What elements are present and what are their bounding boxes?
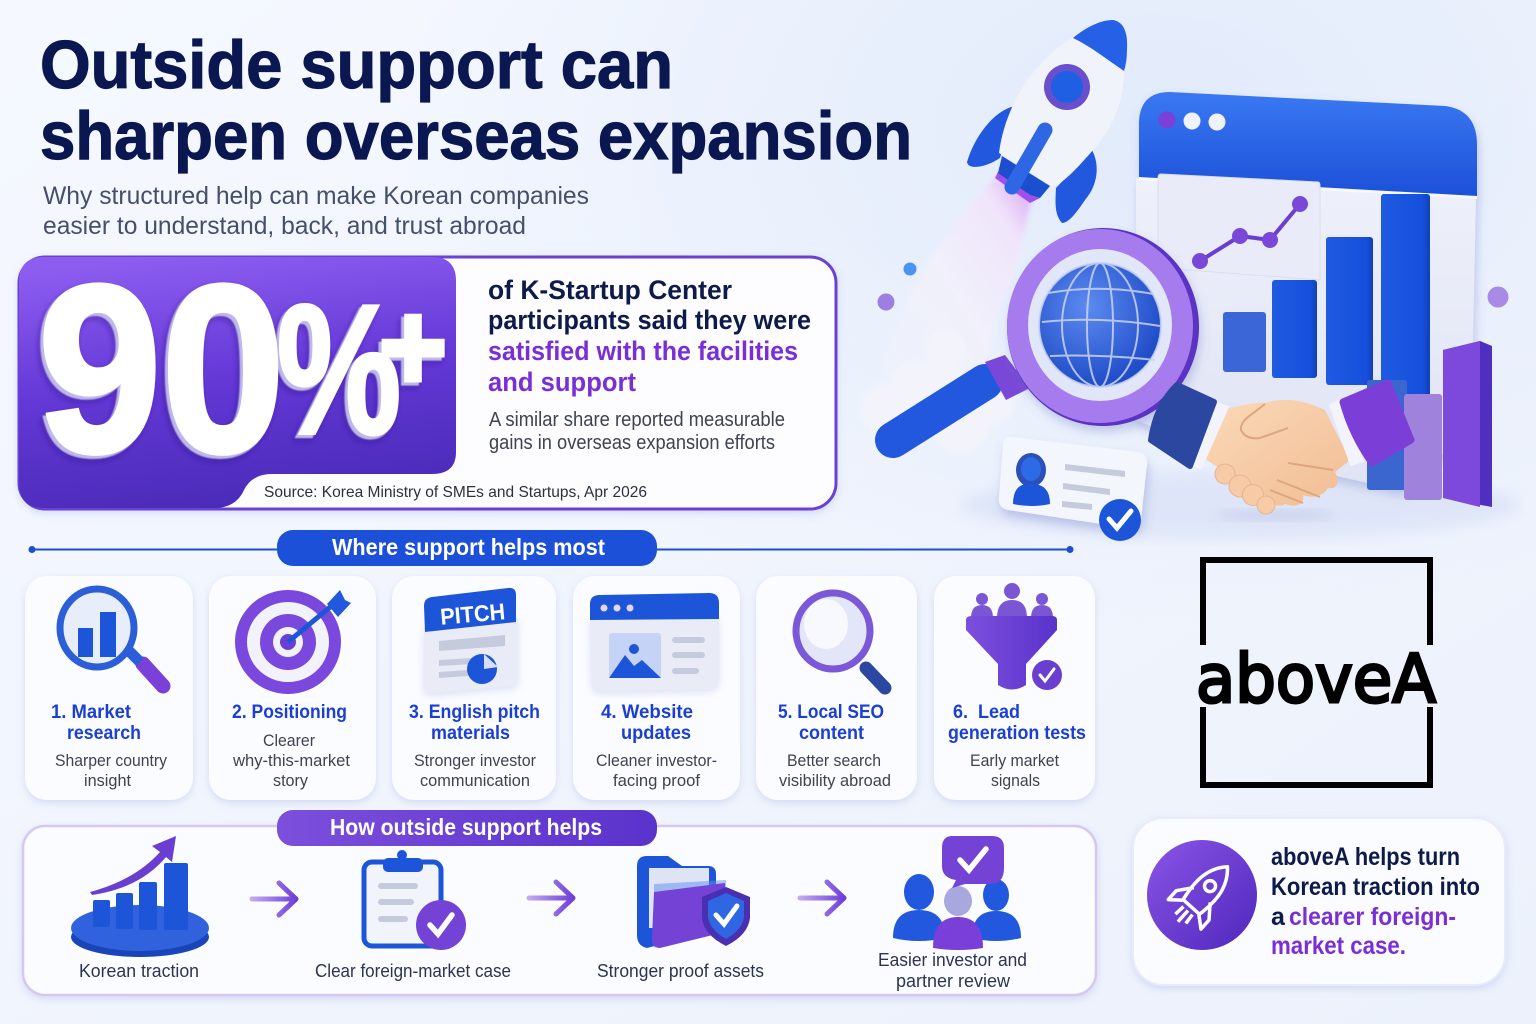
card text: signals: [991, 771, 1040, 790]
card text: updates: [621, 722, 691, 744]
magnifying glass with globe: [893, 228, 1199, 440]
card text: 6. Lead: [953, 701, 1020, 723]
big number 90%+: 90: [38, 237, 285, 502]
line chart: [1192, 196, 1308, 269]
card text: Early market: [970, 751, 1059, 770]
title: sharpen overseas expansion: [40, 98, 912, 174]
card text: [232, 701, 350, 790]
arrow: [529, 882, 573, 914]
icon: rocket badge: [1147, 840, 1257, 950]
icon: website window: [590, 593, 719, 691]
card text: [51, 701, 167, 790]
stat statement: satisfied with the facilities: [488, 336, 798, 366]
arrow: [252, 883, 296, 915]
big number 90%+: +: [379, 278, 447, 417]
card text: generation tests: [948, 722, 1086, 744]
callout text: [1271, 843, 1480, 960]
title: [40, 27, 912, 174]
card text: why-this-market: [232, 751, 350, 770]
label: Korean traction: [79, 961, 199, 981]
icon: pitch document: [423, 588, 518, 693]
rocket: [967, 20, 1127, 223]
panel: 90% statistic: [19, 237, 836, 509]
section heading: where support helps most: Where support helps most: [332, 534, 605, 560]
handshake: [1151, 383, 1411, 521]
callout text: a: [1271, 903, 1286, 931]
label: Easier investor and: [878, 950, 1027, 970]
callout text: aboveA helps turn: [1271, 843, 1460, 871]
stat statement: and support: [488, 367, 636, 397]
card text: 1. Market: [51, 701, 131, 723]
subtitle: [43, 182, 589, 240]
card text: 2. Positioning: [232, 701, 347, 723]
label: [878, 950, 1027, 991]
aboveA logo: [1196, 560, 1436, 785]
card 2: positioning: [209, 576, 376, 800]
label: Stronger proof assets: [597, 961, 764, 981]
floor glow: [960, 471, 1520, 539]
icon: funnel with people: [966, 583, 1062, 690]
card text: story: [273, 771, 308, 790]
aboveA logo: aboveA: [1196, 640, 1436, 718]
card text: research: [67, 722, 141, 744]
card text: materials: [431, 722, 510, 744]
arrow: [800, 882, 844, 914]
icon: clipboard with check: [364, 850, 466, 950]
card text: 4. Website: [601, 701, 693, 723]
card text: Cleaner investor-: [596, 751, 717, 770]
card text: facing proof: [613, 771, 700, 790]
hero illustration: [861, 20, 1520, 541]
card text: Stronger investor: [414, 751, 536, 770]
globe: [1039, 263, 1161, 387]
icon: traction chart on disc: [71, 836, 209, 957]
title: Outside support can: [40, 27, 673, 103]
card text: visibility abroad: [779, 771, 891, 790]
big number 90%+: [38, 237, 447, 502]
card text: content: [799, 722, 864, 744]
callout: aboveA summary: [1133, 818, 1505, 985]
card text: 3. English pitch: [409, 701, 540, 723]
rocket exhaust: [861, 176, 1032, 453]
card text: 5. Local SEO: [778, 701, 884, 723]
card text: communication: [420, 771, 530, 790]
panel heading pill: How outside support helps: [330, 814, 602, 840]
icon: target with arrow: [235, 590, 351, 694]
card text: insight: [84, 771, 131, 790]
label: Clear foreign-market case: [315, 961, 511, 981]
card text: Better search: [787, 751, 881, 770]
subtitle: easier to understand, back, and trust abroad: [43, 212, 526, 240]
card 4: website updates: [573, 576, 740, 800]
supporting note: gains in overseas expansion efforts: [489, 432, 775, 454]
supporting note: A similar share reported measurable: [489, 409, 785, 431]
id card with check: [999, 437, 1147, 541]
label: partner review: [896, 971, 1011, 991]
card 3: english pitch materials: [392, 576, 556, 800]
supporting note: [489, 409, 785, 454]
stat statement: of K-Startup Center: [488, 275, 732, 305]
section heading: where support helps most: [28, 530, 1074, 566]
subtitle: Why structured help can make Korean companies: [43, 182, 589, 210]
panel: how outside support helps: [23, 810, 1096, 995]
window dots: [1158, 112, 1226, 130]
icon: pitch document: PITCH: [439, 598, 506, 630]
callout text: clearer foreign-: [1289, 903, 1456, 931]
icon: reviewers with speech bubble: [893, 836, 1021, 950]
panel heading pill: [277, 810, 657, 846]
card text: [596, 701, 717, 790]
stat statement: participants said they were: [488, 305, 811, 335]
lilac and purple bars: [1367, 341, 1492, 507]
source: Source: Korea Ministry of SMEs and Startups, Apr 2026: [264, 484, 647, 501]
callout text: market case.: [1271, 932, 1406, 960]
callout text: Korean traction into: [1271, 873, 1480, 901]
card 5: local seo content: [756, 576, 917, 800]
big number 90%+: %: [277, 266, 401, 472]
floating dots: [878, 262, 1508, 310]
card text: [948, 701, 1086, 790]
icon: magnifier: [796, 593, 885, 688]
icon: magnifier with bars: [60, 589, 163, 686]
card text: Clearer: [263, 731, 315, 750]
card text: [409, 701, 540, 790]
stat statement: [488, 275, 811, 397]
icon: folder with shield: [637, 856, 750, 948]
card text: Sharper country: [55, 751, 167, 770]
blue bars: [1223, 194, 1430, 399]
purple stat block: [19, 257, 456, 508]
browser window: [1136, 92, 1477, 490]
card 1: market research: [25, 576, 193, 800]
card 6: lead generation tests: [934, 576, 1095, 800]
card text: [778, 701, 891, 790]
